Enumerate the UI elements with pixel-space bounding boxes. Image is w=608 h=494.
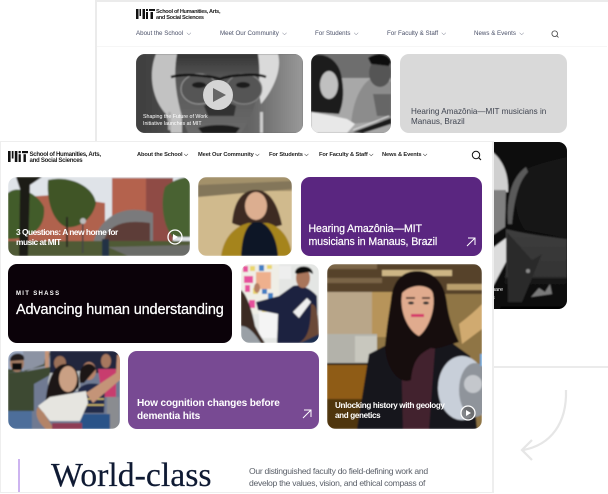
back navigation: About the School ⌵ bbox=[136, 30, 191, 37]
back photo card bbox=[311, 54, 391, 133]
body text bbox=[249, 466, 428, 488]
card: How cognition changes: How cognition changes before bbox=[137, 398, 280, 409]
back logo bbox=[136, 9, 220, 21]
back video card bbox=[136, 54, 303, 133]
card: Advancing human understanding: Advancing human understanding bbox=[16, 302, 224, 318]
card: geology and genetics portrait bbox=[327, 264, 482, 429]
front navigation: News & Events ⌵ bbox=[382, 152, 427, 158]
back navigation: For Faculty & Staff ⌵ bbox=[387, 30, 446, 37]
icon: arrow bbox=[302, 410, 312, 418]
back video card: Shaping the Future of Work bbox=[143, 114, 208, 120]
body text: Our distinguished faculty do field-defining work and bbox=[249, 466, 428, 476]
back logo: School of Humanities, Arts, bbox=[156, 9, 220, 15]
card: new home for music: 3 Questions: A new home for bbox=[16, 227, 118, 237]
back grey card: Manaus, Brazil bbox=[411, 117, 465, 126]
card: lecturer photo bbox=[241, 264, 319, 343]
back logo: and Social Sciences bbox=[156, 15, 204, 21]
body text: develop the values, vision, and ethical compass of bbox=[249, 478, 425, 488]
back grey card bbox=[400, 54, 567, 133]
back page panel bbox=[95, 0, 608, 368]
back header bbox=[97, 2, 607, 47]
card: How cognition changes bbox=[128, 351, 319, 429]
front navigation: For Faculty & Staff ⌵ bbox=[319, 152, 373, 158]
front navigation bbox=[137, 150, 482, 160]
front navigation: Meet Our Community ⌵ bbox=[198, 152, 259, 158]
card: geology and genetics portrait: Unlocking history with geology bbox=[335, 401, 445, 410]
back navigation: News & Events ⌵ bbox=[474, 30, 524, 37]
card: Hearing Amazônia bbox=[301, 177, 482, 256]
card: How cognition changes: dementia hits bbox=[137, 411, 200, 422]
card: Hearing Amazônia: musicians in Manaus, Brazil bbox=[308, 236, 437, 248]
back video card: Initiative launches at MIT bbox=[143, 121, 202, 127]
front navigation: For Students ⌵ bbox=[269, 152, 309, 158]
back navigation: For Students ⌵ bbox=[315, 30, 359, 37]
front logo bbox=[8, 150, 101, 164]
front logo: School of Humanities, Arts, bbox=[30, 150, 101, 158]
front logo: and Social Sciences bbox=[30, 157, 82, 164]
card: Advancing human understanding: MIT SHASS bbox=[16, 290, 60, 296]
front navigation: About the School ⌵ bbox=[137, 152, 188, 158]
lavender accent bar bbox=[18, 459, 20, 492]
icon: arrow bbox=[466, 238, 476, 246]
back dark portrait card bbox=[400, 142, 567, 309]
back navigation bbox=[136, 30, 559, 38]
heading: World-class: World-class bbox=[51, 457, 212, 494]
card: students raising hands bbox=[8, 351, 120, 429]
card: portrait in yellow coat bbox=[198, 177, 292, 256]
card: Hearing Amazônia: Hearing Amazônia—MIT bbox=[308, 223, 422, 235]
back grey card: Hearing Amazônia—MIT musicians in bbox=[411, 107, 546, 116]
card: new home for music bbox=[8, 177, 190, 256]
back dark portrait card: s bbox=[492, 295, 495, 301]
front page panel bbox=[0, 141, 494, 493]
back dark portrait card: hare bbox=[492, 287, 503, 293]
back navigation: Meet Our Community ⌵ bbox=[220, 30, 287, 37]
card: new home for music: music at MIT bbox=[16, 237, 61, 247]
card: geology and genetics portrait: and genetics bbox=[335, 411, 380, 420]
card: Advancing human understanding bbox=[8, 264, 232, 343]
curved arrow bbox=[520, 390, 567, 460]
